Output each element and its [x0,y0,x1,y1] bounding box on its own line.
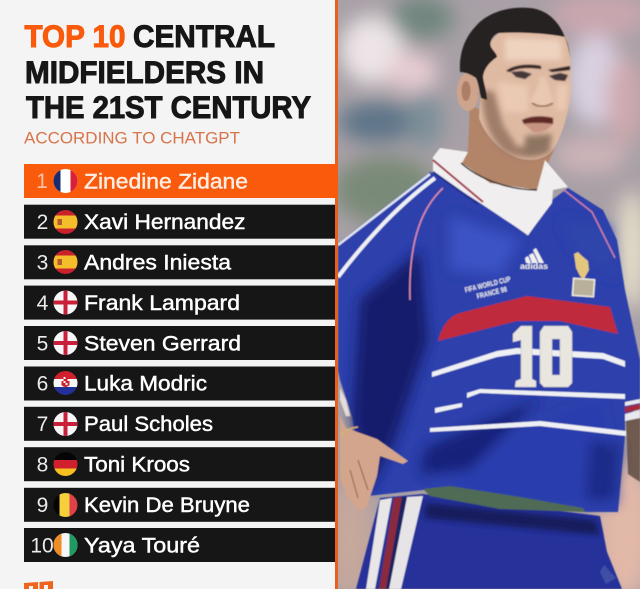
head [457,8,571,160]
ranking row 7: Paul Scholes: 7 [37,413,48,436]
adidas logo [520,248,549,271]
flag: Belgium [52,492,78,518]
ranking row 2: Xavi Hernandez: 2 [37,211,48,234]
ranking row 5: Steven Gerrard: 5 [37,332,48,356]
right arm [626,418,640,482]
ranking row 6: Luka Modric: Luka Modric [84,372,207,396]
ranking row 1: Zinedine Zidane: Zinedine Zidane [84,170,248,194]
ranking row 4: Frank Lampard: 4 [37,292,49,315]
adidas logo: adidas [520,262,549,271]
title [24,18,311,125]
ranking row 7: Paul Scholes: Paul Scholes [84,413,213,436]
ranking row 3: Andres Iniesta [24,245,335,279]
world cup text: FIFA WORLD CUP [464,274,512,295]
flag: Croatia [54,371,78,395]
ranking row 3: Andres Iniesta: 3 [37,252,48,274]
flag: France [54,169,78,193]
flag: Spain [54,210,78,234]
ranking row 3: Andres Iniesta: Andres Iniesta [84,252,231,274]
ranking row 1: Zinedine Zidane: 1 [36,170,48,193]
ranking row 8: Toni Kroos: Toni Kroos [84,454,190,476]
red chest band [438,296,618,341]
neck [460,105,556,190]
world cup text [464,276,511,300]
ranking row 2: Xavi Hernandez [24,205,335,239]
ranking row 9: Kevin De Bruyne: Kevin De Bruyne [84,494,250,517]
jersey [338,172,640,512]
ranking row 8: Toni Kroos [24,447,335,481]
title: TOP 10 [24,18,126,54]
nose [532,78,552,106]
flag: Germany [52,451,78,478]
crest [572,252,595,297]
title: THE 21ST CENTURY [26,89,311,125]
eyebrows and eyes [506,65,570,81]
title: CENTRAL [133,18,275,54]
ear [457,73,479,111]
ranking row 4: Frank Lampard: Frank Lampard [84,292,240,315]
ranking row 6: Luka Modric [24,366,335,400]
shirt number 10 [513,326,572,387]
title: MIDFIELDERS IN [25,54,264,90]
mouth [522,116,553,132]
ranking row 10: Yaya Touré: 10 [30,534,54,558]
ranking row 6: Luka Modric: 6 [37,372,48,396]
flag: Ivory Coast [52,532,78,558]
photo: Zinedine Zidane in France shirt [325,0,640,589]
sleeve cuff [625,399,640,421]
left panel background [0,0,335,589]
orange vertical divider [335,0,338,589]
ranking row 8: Toni Kroos: 8 [37,454,48,476]
subtitle: ACCORDING TO CHATGPT [24,130,240,148]
photo background crowd [325,0,640,589]
ranking row 5: Steven Gerrard [24,326,335,360]
ranking row 10: Yaya Touré [24,528,335,562]
flag: England [54,331,78,355]
collar [433,148,568,235]
waist band [423,486,585,512]
ranking row 4: Frank Lampard [24,286,335,320]
ranking row 5: Steven Gerrard: Steven Gerrard [84,332,241,356]
face [479,32,571,160]
flag: England [54,290,78,314]
white chest lines [432,348,625,377]
flag: England [54,412,78,436]
jersey shoulder stripes [338,178,435,277]
hair [460,8,570,100]
flag: Spain [54,250,78,274]
ranking row 1: Zinedine Zidane [24,164,338,198]
ranking row 9: Kevin De Bruyne: 9 [37,494,48,517]
ranking row 2: Xavi Hernandez: Xavi Hernandez [84,211,246,234]
player figure [338,8,640,589]
arm and hand [340,416,408,511]
ranking row 9: Kevin De Bruyne [24,488,335,522]
ranking row 10: Yaya Touré: Yaya Touré [84,534,200,558]
world cup text: FRANCE 98 [476,285,508,301]
icon: brand logo, cropped by bottom edge [24,581,53,589]
shorts [356,494,622,589]
ranking row 7: Paul Scholes [24,407,335,441]
